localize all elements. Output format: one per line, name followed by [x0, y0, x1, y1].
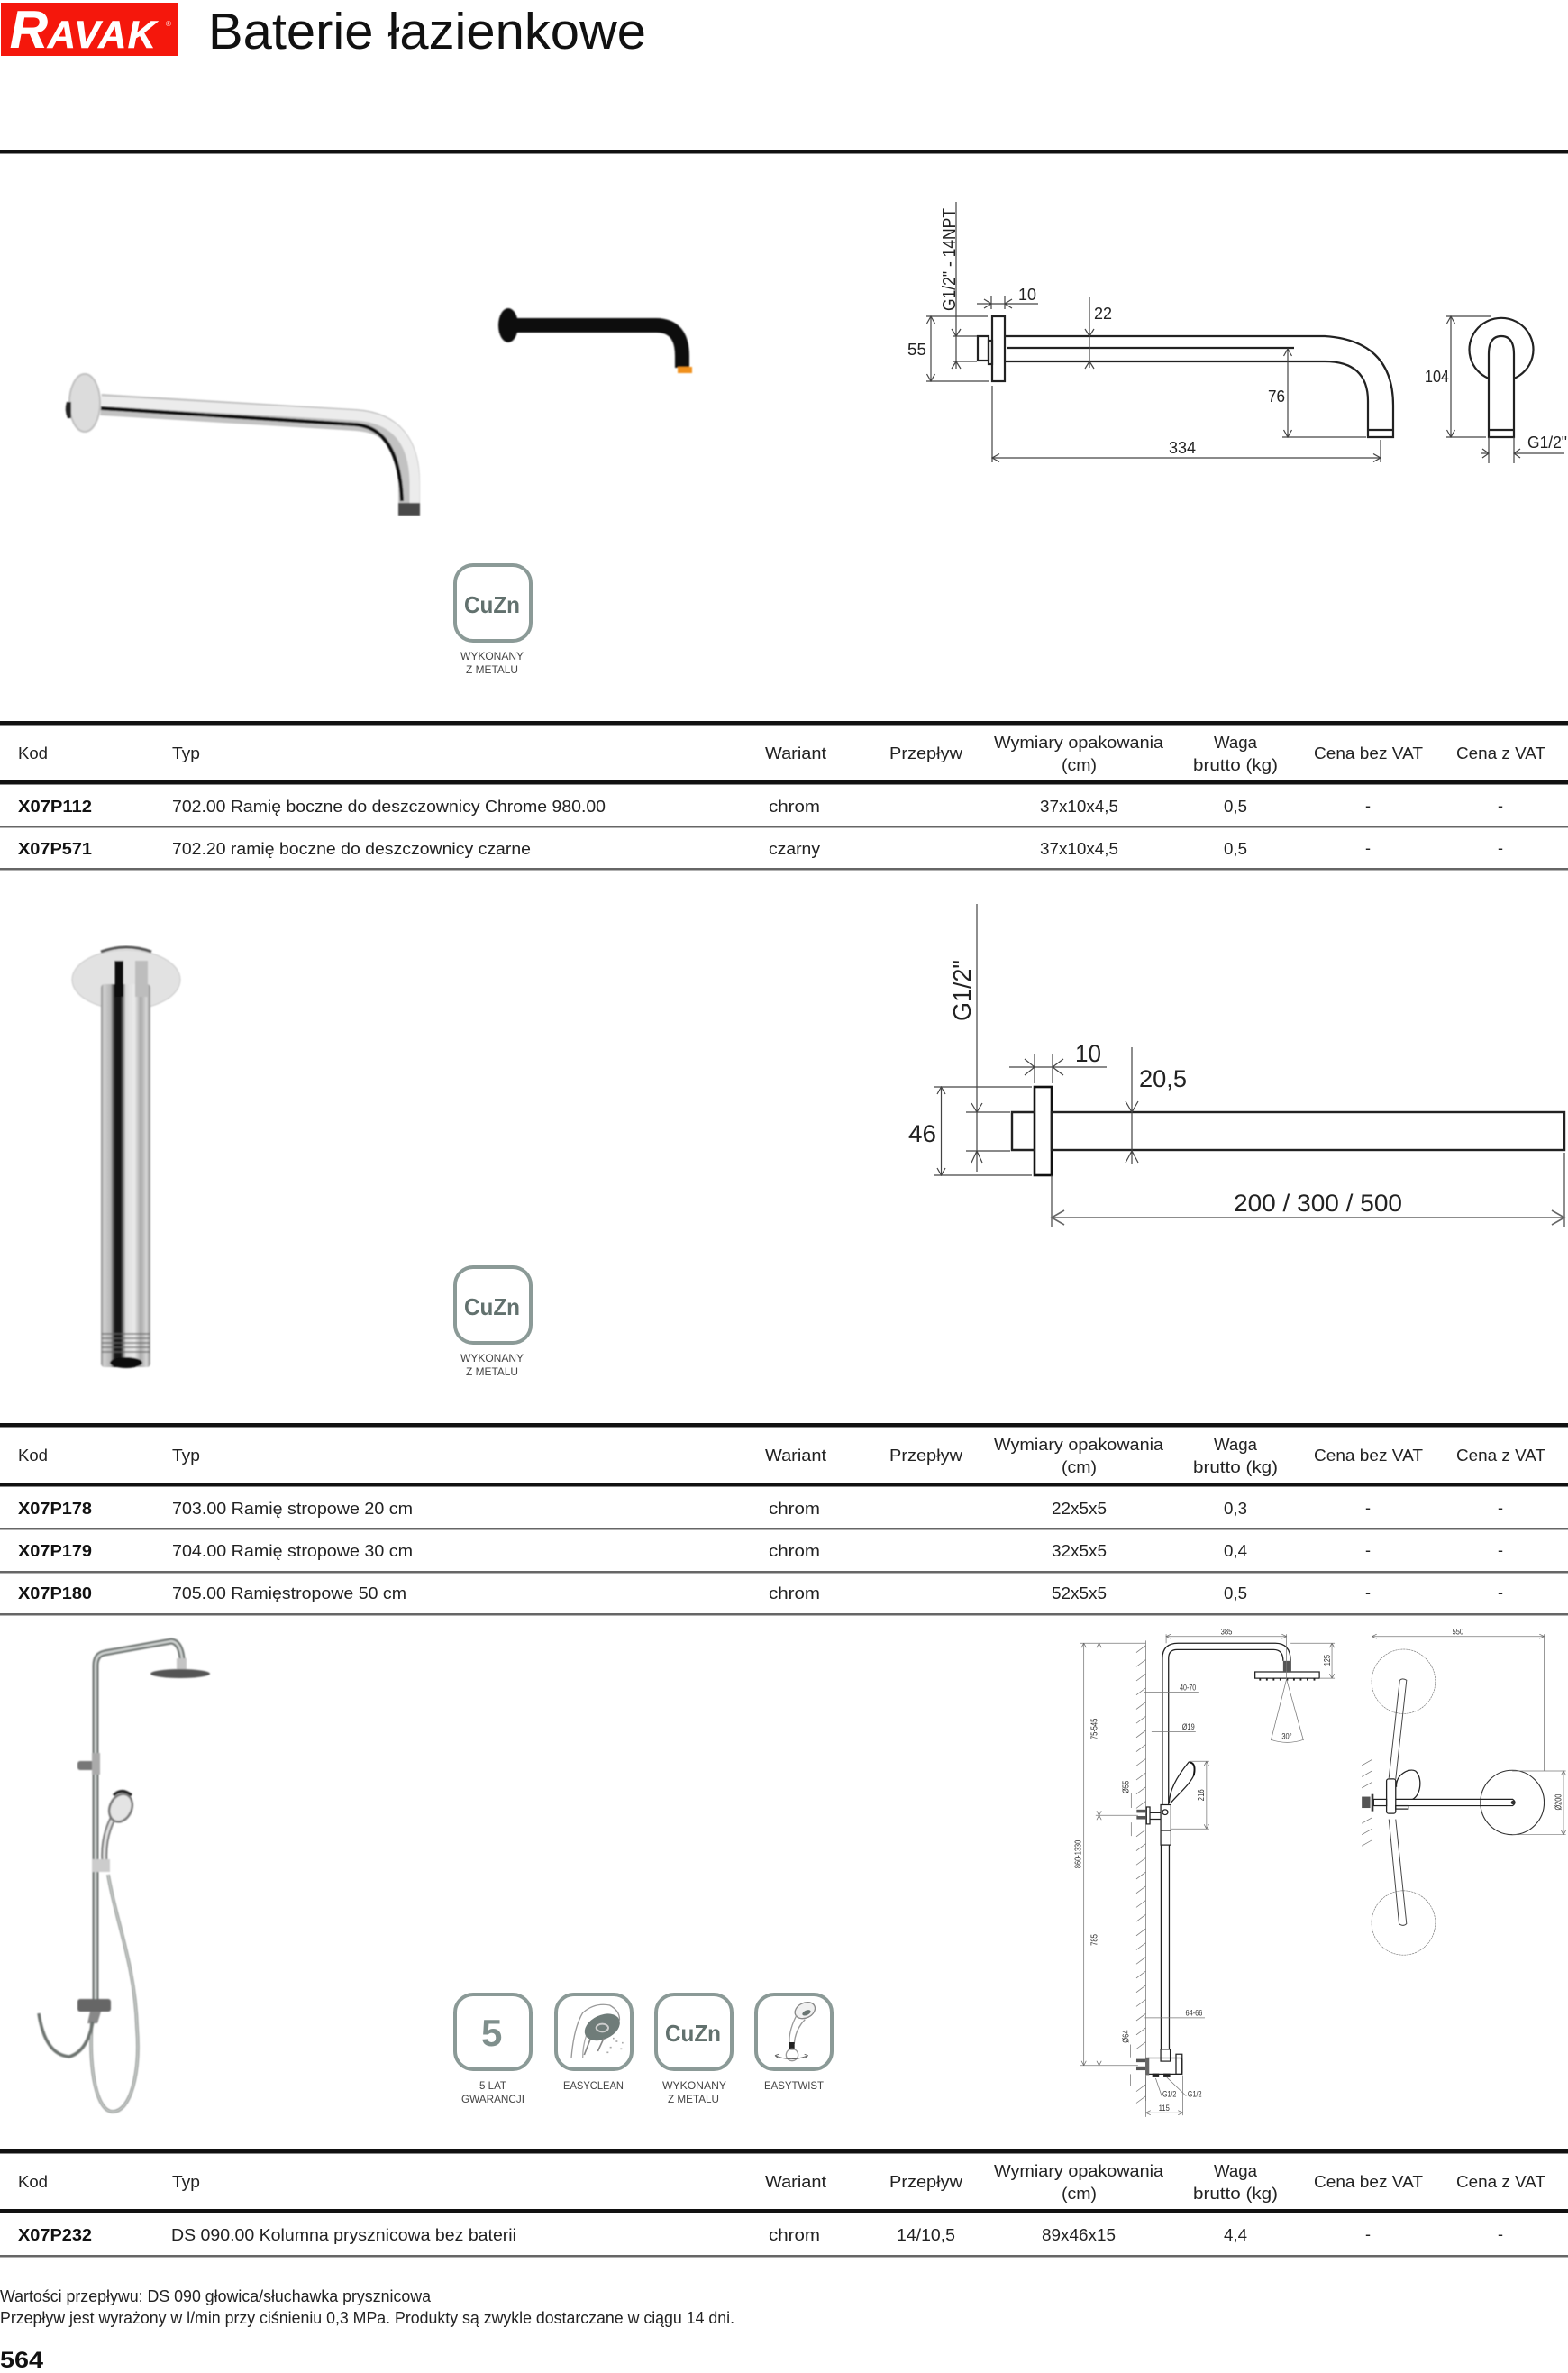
table 2 header row: Przepływ [889, 1447, 963, 1465]
icon: 5 year warranty: GWARANCJI [461, 2093, 524, 2105]
table 3 header row: Cena bez VAT [1314, 2173, 1423, 2191]
dimensions side view: 385 [1221, 1628, 1233, 1637]
table 1 header row [18, 734, 1545, 774]
technical drawing: ceiling arm dimensions: 20,5 [1139, 1065, 1187, 1092]
table 2 row X07P180: - [1498, 1584, 1503, 1602]
table 2 row X07P179: 0,4 [1224, 1542, 1247, 1560]
table 3 row X07P232: 4,4 [1224, 2226, 1247, 2244]
table 1 row X07P112 [18, 797, 1503, 816]
table 1 header row: brutto (kg) [1193, 756, 1278, 774]
table 2 header row: Wariant [765, 1447, 826, 1465]
icon: CuZn badge 1 [455, 565, 531, 676]
technical drawing: side arm dimensions: 76 [1268, 388, 1285, 406]
technical drawing: side arm dimensions: 22 [1094, 305, 1112, 323]
icon: easytwist [756, 1994, 832, 2092]
dimensions side view: Ø19 [1182, 1722, 1195, 1732]
icon: CuZn badge 3 [656, 1994, 732, 2105]
dimensions side view [1073, 1628, 1335, 2117]
table 2 row X07P179: X07P179 [18, 1542, 92, 1560]
table 3 row X07P232: DS 090.00 Kolumna prysznicowa bez baterii [171, 2226, 516, 2244]
dimensions side view: G1/2 [1188, 2090, 1202, 2099]
table 1 row X07P112: 37x10x4,5 [1040, 798, 1118, 816]
technical drawing: side arm dimensions: 334 [1169, 439, 1196, 457]
icon: 5 year warranty [455, 1994, 531, 2105]
icon: easyclean: EASYCLEAN [563, 2079, 624, 2092]
icon: CuZn badge 2 [455, 1267, 531, 1378]
icon: easytwist: EASYTWIST [764, 2079, 825, 2092]
dimensions side view: 75-545 [1090, 1718, 1100, 1739]
table 1 header row: Wariant [765, 744, 826, 762]
table 2 row X07P180 [18, 1584, 1503, 1602]
icon: CuZn badge 3: CuZn [665, 2020, 721, 2047]
dimensions side view: 785 [1090, 1934, 1100, 1946]
icon: CuZn badge 2: WYKONANY [460, 1352, 524, 1364]
table 3 header row: Wymiary opakowania [994, 2162, 1164, 2180]
product photo: chrome side arm [66, 374, 420, 516]
table 2 row X07P180: 0,5 [1224, 1584, 1247, 1602]
icon: CuZn badge 1: WYKONANY [460, 650, 524, 662]
technical drawing: side arm dimensions: 104 [1425, 368, 1449, 386]
technical drawing: side arm dimensions: G1/2" - 14NPT [940, 208, 960, 311]
technical drawing: side arm dimensions [907, 202, 1567, 463]
table 2 header row: (cm) [1062, 1458, 1097, 1476]
table 3 row X07P232: - [1498, 2225, 1503, 2243]
table 2 header row: Typ [172, 1447, 200, 1465]
dimensions side view: Ø55 [1121, 1780, 1131, 1793]
table 1 header row: (cm) [1062, 756, 1097, 774]
table 3 header row [18, 2162, 1545, 2203]
table 1 header row: Cena z VAT [1456, 744, 1545, 762]
dimensions side view: 115 [1159, 2104, 1170, 2113]
table 1 row X07P112: 0,5 [1224, 798, 1247, 816]
table 1 header row: Cena bez VAT [1314, 744, 1423, 762]
table 2 row X07P178: - [1365, 1499, 1371, 1517]
table 2 row X07P179 [18, 1541, 1503, 1560]
table 2 row X07P178: - [1498, 1499, 1503, 1517]
icon: 5 year warranty: 5 [481, 2012, 502, 2054]
table 2 header row: Waga [1214, 1436, 1258, 1454]
table 2 row X07P178: X07P178 [18, 1500, 92, 1518]
table 2 row X07P179: 32x5x5 [1052, 1542, 1107, 1560]
table 2 header row: Kod [18, 1447, 48, 1465]
table 3 header row: brutto (kg) [1193, 2185, 1278, 2203]
icon: CuZn badge 3: Z METALU [668, 2093, 719, 2105]
table 2 row X07P180: chrom [769, 1584, 820, 1602]
top view [1362, 1628, 1566, 1955]
table 1 row X07P571: - [1365, 839, 1371, 857]
table 2 row X07P178: 0,3 [1224, 1500, 1247, 1518]
table 3 row X07P232: X07P232 [18, 2226, 92, 2244]
table 1 row X07P571 [18, 839, 1503, 858]
footnote: Przepływ jest wyrażony w l/min przy ciśnieniu 0,3 MPa. Produkty są zwykle dostarczane w ciągu 14 dni. [0, 2309, 734, 2327]
dimensions side view: 125 [1323, 1655, 1333, 1666]
table 1 header row: Typ [172, 744, 200, 762]
dimensions side view: 64-66 [1186, 2009, 1203, 2019]
icon: CuZn badge 1: Z METALU [466, 663, 518, 676]
table 2 header row [18, 1436, 1545, 1476]
table 1 [0, 721, 1568, 871]
technical drawing: ceiling arm dimensions: 200 / 300 / 500 [1234, 1190, 1402, 1217]
table 3 row X07P232 [18, 2225, 1503, 2244]
table 2 row X07P180: 705.00 Ramięstropowe 50 cm [172, 1584, 406, 1602]
page number: 564 [0, 2348, 43, 2373]
icon: 5 year warranty: 5 LAT [479, 2079, 507, 2092]
dimensions side view: 40-70 [1180, 1684, 1197, 1693]
dimensions side view: Ø64 [1121, 2030, 1131, 2043]
table 2 row X07P178: chrom [769, 1500, 820, 1518]
table 1 row X07P571: - [1498, 839, 1503, 857]
table 3 header row: (cm) [1062, 2185, 1097, 2203]
table 2 row X07P178: 22x5x5 [1052, 1500, 1107, 1518]
header rule [0, 150, 1568, 153]
table 2 row X07P179: 704.00 Ramię stropowe 30 cm [172, 1542, 413, 1560]
table 1 header row: Wymiary opakowania [994, 734, 1164, 752]
table 1 row X07P571: 37x10x4,5 [1040, 840, 1118, 858]
table 3 header row: Wariant [765, 2173, 826, 2191]
dimensions side view: G1/2 [1162, 2090, 1176, 2099]
table 3 header row: Kod [18, 2173, 48, 2191]
table 1 header row: Przepływ [889, 744, 963, 762]
table 1 header row: Waga [1214, 734, 1258, 752]
technical drawing: side arm dimensions: 10 [1018, 286, 1036, 304]
technical drawing: ceiling arm dimensions [908, 904, 1564, 1227]
table 2 header row: Cena z VAT [1456, 1447, 1545, 1465]
table 2 row X07P180: 52x5x5 [1052, 1584, 1107, 1602]
technical drawing: side arm dimensions: G1/2" [1527, 434, 1567, 452]
product photo: shower column [39, 1641, 210, 2112]
table 1 row X07P571: X07P571 [18, 840, 92, 858]
table 3 row X07P232: 89x46x15 [1042, 2226, 1116, 2244]
dimensions side view: 30° [1281, 1732, 1292, 1742]
footnote [0, 2287, 734, 2327]
table 1 row X07P112: - [1365, 797, 1371, 815]
table 2 row X07P179: chrom [769, 1542, 820, 1560]
table 2 row X07P178: 703.00 Ramię stropowe 20 cm [172, 1500, 413, 1518]
icon: CuZn badge 1: CuZn [464, 591, 520, 618]
icon: CuZn badge 3: WYKONANY [662, 2079, 726, 2092]
table 3 header row: Cena z VAT [1456, 2173, 1545, 2191]
table 2 [0, 1423, 1568, 1615]
table 2 header row: Wymiary opakowania [994, 1436, 1164, 1454]
dimensions side view: 860-1330 [1073, 1839, 1084, 1868]
table 1 row X07P112: - [1498, 797, 1503, 815]
product photo: black side arm [498, 308, 692, 373]
table 3 row X07P232: 14/10,5 [897, 2226, 955, 2244]
technical drawing: ceiling arm dimensions: G1/2" [948, 960, 976, 1021]
column and rain head [1136, 1643, 1319, 2077]
top view: 550 [1453, 1628, 1463, 1637]
table 1 row X07P112: X07P112 [18, 798, 92, 816]
technical drawing: ceiling arm dimensions: 46 [908, 1120, 936, 1147]
table 3 row X07P232: chrom [769, 2226, 820, 2244]
table 3 header row: Przepływ [889, 2173, 963, 2191]
table 2 row X07P179: - [1498, 1541, 1503, 1559]
technical drawing: shower column side and top view [1073, 1628, 1566, 2117]
dimensions side view: 216 [1197, 1789, 1207, 1801]
icon: CuZn badge 2: Z METALU [466, 1365, 518, 1378]
table 2 row X07P180: - [1365, 1584, 1371, 1602]
product photo: ceiling arm [72, 947, 180, 1368]
table 3 row X07P232: - [1365, 2225, 1371, 2243]
table 2 row X07P178 [18, 1499, 1503, 1518]
table 1 row X07P112: chrom [769, 798, 820, 816]
table 2 header row: brutto (kg) [1193, 1458, 1278, 1476]
top view: Ø200 [1554, 1793, 1564, 1811]
icon: easyclean [556, 1994, 632, 2092]
logo: RAVAK: RAVAK [10, 1, 159, 59]
table 2 row X07P180: X07P180 [18, 1584, 92, 1602]
table 3 header row: Typ [172, 2173, 200, 2191]
table 3 header row: Waga [1214, 2162, 1258, 2180]
table 2 header row: Cena bez VAT [1314, 1447, 1423, 1465]
table 1 row X07P571: 702.20 ramię boczne do deszczownicy czarne [172, 840, 531, 858]
technical drawing: ceiling arm dimensions: 10 [1075, 1040, 1101, 1067]
icon: CuZn badge 2: CuZn [464, 1293, 520, 1320]
table 3 [0, 2149, 1568, 2257]
table 2 row X07P179: - [1365, 1541, 1371, 1559]
table 1 header row: Kod [18, 744, 48, 762]
technical drawing: side arm dimensions: 55 [907, 341, 926, 359]
table 1 row X07P112: 702.00 Ramię boczne do deszczownicy Chrome 980.00 [172, 798, 606, 816]
wall hatching: side view [1136, 1640, 1146, 2104]
table 1 row X07P571: czarny [769, 840, 820, 858]
logo: RAVAK: ® [166, 20, 171, 28]
footnote: Wartości przepływu: DS 090 głowica/słuchawka prysznicowa [0, 2287, 432, 2305]
table 1 row X07P571: 0,5 [1224, 840, 1247, 858]
title: Baterie łazienkowe [208, 3, 646, 60]
